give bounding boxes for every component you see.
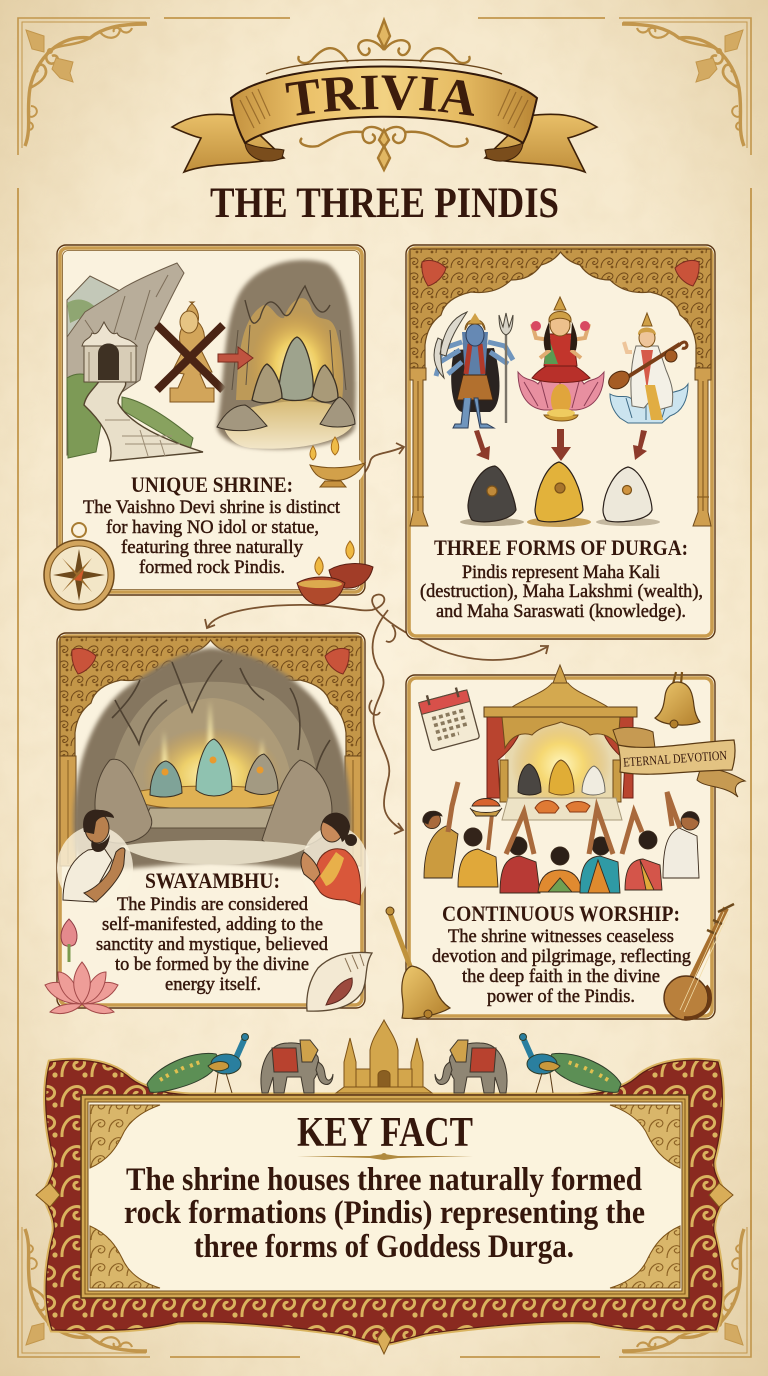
panel text: The Vaishno Devi shrine is distinct	[83, 498, 341, 518]
connector arrows	[205, 443, 548, 834]
panel text: The shrine witnesses ceaseless	[448, 927, 674, 947]
panel text: UNIQUE SHRINE:	[131, 472, 293, 497]
icon: veena	[664, 904, 734, 1020]
arch with columns	[410, 249, 711, 526]
icon: crossed-out idol	[157, 302, 223, 402]
panel text: formed rock Pindis.	[139, 558, 285, 578]
arrow	[218, 347, 253, 369]
icon: hand bell	[386, 907, 450, 1018]
panel text	[83, 472, 341, 578]
banner title text	[288, 109, 478, 117]
panel frame	[406, 245, 715, 639]
icon: twin diyas	[297, 541, 373, 605]
panel text: Pindis represent Maha Kali	[462, 563, 660, 583]
temple ornament	[336, 1020, 432, 1093]
panel text: CONTINUOUS WORSHIP:	[442, 901, 680, 926]
panel text: for having NO idol or statue,	[106, 518, 319, 538]
peacock left	[147, 1034, 248, 1093]
elephant left	[261, 1040, 333, 1093]
illustration: maha saraswati	[605, 313, 688, 423]
panel text	[432, 901, 691, 1007]
arch with columns	[60, 637, 361, 866]
key fact text	[124, 1162, 645, 1265]
panel text: to be formed by the divine	[115, 955, 309, 975]
key fact text: three forms of Goddess Durga.	[194, 1229, 574, 1265]
illustration: maha lakshmi	[518, 297, 604, 421]
key fact text: rock formations (Pindis) representing the	[124, 1195, 645, 1231]
illustration: cave with three pindis	[217, 260, 356, 449]
panel text: self-manifested, adding to the	[102, 915, 323, 935]
main heading: THE THREE PINDIS	[210, 180, 559, 227]
title banner	[170, 16, 599, 174]
panel text: The Pindis are considered	[117, 895, 309, 915]
icon: oil lamp	[308, 437, 365, 488]
key fact heading: KEY FACT	[297, 1110, 473, 1156]
key fact text: The shrine houses three naturally formed	[126, 1162, 642, 1198]
ornate red and gold frame	[36, 1060, 733, 1354]
corner ornaments	[90, 1105, 680, 1288]
panel text: (destruction), Maha Lakshmi (wealth),	[420, 582, 703, 602]
panel: three forms of durga	[406, 245, 715, 639]
ribbon tails	[172, 114, 284, 172]
divider	[297, 1153, 473, 1160]
panel text	[96, 868, 329, 995]
panel text: THREE FORMS OF DURGA:	[434, 535, 688, 560]
panel text: power of the Pindis.	[487, 987, 635, 1007]
illustration: cave interior with glowing pindis	[73, 648, 351, 869]
illustration: temple shrine	[484, 665, 637, 820]
panel text: the deep faith in the divine	[462, 967, 660, 987]
panel frame	[57, 633, 365, 1008]
illustration: worshippers	[423, 782, 699, 893]
illustration: praying man	[57, 810, 133, 910]
panel text: SWAYAMBHU:	[145, 868, 280, 893]
icon: lotus bud	[61, 919, 77, 962]
panel text	[420, 535, 703, 622]
banner crest ornament	[266, 20, 502, 170]
title banner: TRIVIA	[285, 75, 474, 116]
panel: continuous worship	[386, 665, 745, 1020]
panel: key fact	[36, 1020, 733, 1354]
illustration: three rock pindis	[460, 462, 660, 527]
panel text: sanctity and mystique, believed	[96, 935, 329, 955]
panel frame	[406, 675, 715, 1019]
panel text: energy itself.	[165, 975, 261, 995]
illustration: praying woman	[301, 813, 369, 910]
peacock right	[520, 1034, 621, 1093]
ribbon body	[231, 66, 537, 143]
icon: temple bell	[655, 672, 700, 728]
icon: compass	[44, 523, 114, 610]
panel: unique shrine	[44, 245, 373, 610]
icon: conch shell	[307, 952, 372, 1011]
icon: lotus flower	[45, 962, 118, 1014]
panel text: featuring three naturally	[121, 538, 304, 558]
panel: swayambhu	[45, 633, 372, 1014]
illustration: maha kali	[434, 312, 513, 428]
arrows: deity to pindi	[474, 429, 647, 461]
panel text: devotion and pilgrimage, reflecting	[432, 947, 691, 967]
illustration: mountain path and gate	[67, 263, 203, 461]
banner: eternal devotion	[613, 727, 745, 797]
icon: calendar	[417, 685, 480, 751]
panel frame	[57, 245, 365, 595]
banner: eternal devotion: ETERNAL DEVOTION	[623, 747, 728, 770]
elephant right	[435, 1040, 507, 1093]
panel text: and Maha Saraswati (knowledge).	[436, 602, 686, 622]
